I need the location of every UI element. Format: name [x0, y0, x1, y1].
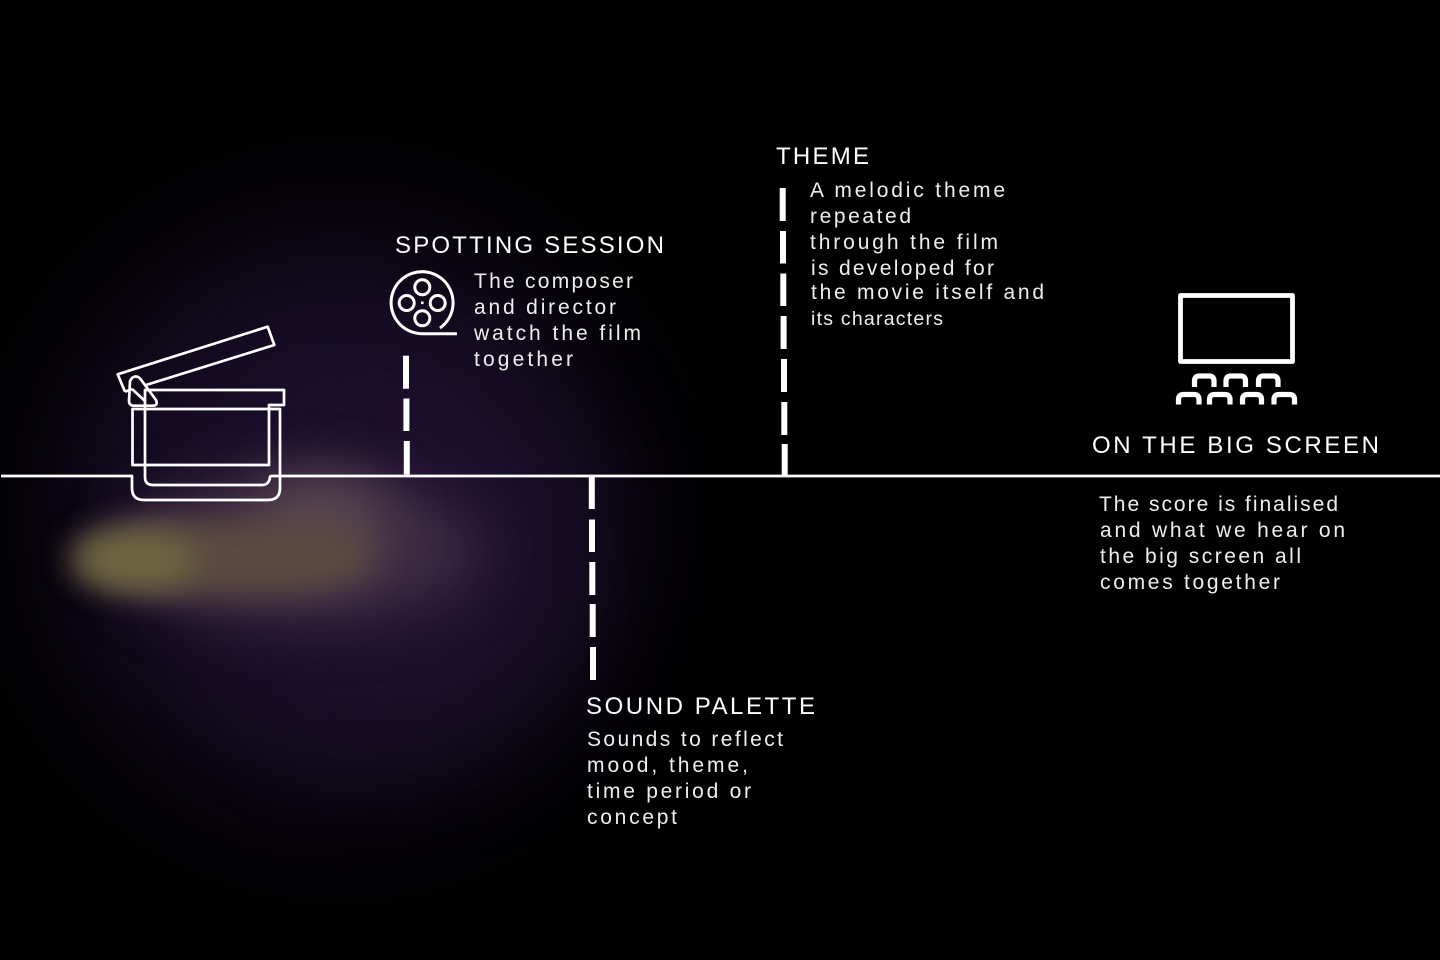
timeline outer path forming clapper body [1, 390, 1440, 500]
text: spotting session description [473, 270, 641, 371]
clapper hinge [129, 376, 157, 406]
clapper arm [118, 327, 274, 392]
text: big screen description: comes together [1100, 571, 1280, 594]
text: spotting session description: The composer [474, 270, 633, 293]
timeline and clapperboard icon [1, 327, 1440, 500]
text: big screen description: The score is finalised [1099, 493, 1338, 516]
dashed connector: theme [780, 188, 788, 475]
text: big screen description [1099, 493, 1345, 594]
heading: on the big screen: ON THE BIG SCREEN [1092, 432, 1379, 459]
text: sound palette description: Sounds to reflect [587, 728, 783, 751]
text: theme description: the movie itself and [811, 281, 1044, 304]
text: theme description: is developed for [811, 257, 994, 280]
text: sound palette description: concept [587, 806, 677, 829]
text: sound palette description: mood, theme, [587, 754, 748, 777]
text: sound palette description: time period or [587, 780, 751, 803]
icon: cinema screen and seats [1178, 296, 1294, 404]
text: spotting session description: and director [474, 296, 616, 319]
dashed connector: spotting session [403, 356, 410, 474]
heading: theme: THEME [776, 143, 869, 170]
text: theme description: A melodic theme [810, 179, 1005, 202]
heading: spotting session: SPOTTING SESSION [395, 232, 664, 259]
text: theme description: repeated [810, 205, 911, 228]
text: sound palette description [587, 728, 783, 829]
text: spotting session description: watch the film [473, 322, 641, 345]
text: spotting session description: together [474, 348, 573, 371]
heading: sound palette: SOUND PALETTE [586, 693, 815, 720]
text: big screen description: and what we hear on [1100, 519, 1345, 542]
text: big screen description: the big screen all [1100, 545, 1301, 568]
text: theme description: its characters [811, 308, 943, 330]
dashed connector: sound palette [589, 476, 596, 680]
icon: film reel [391, 272, 457, 334]
text: theme description [810, 179, 1044, 330]
text: theme description: through the film [810, 231, 998, 254]
